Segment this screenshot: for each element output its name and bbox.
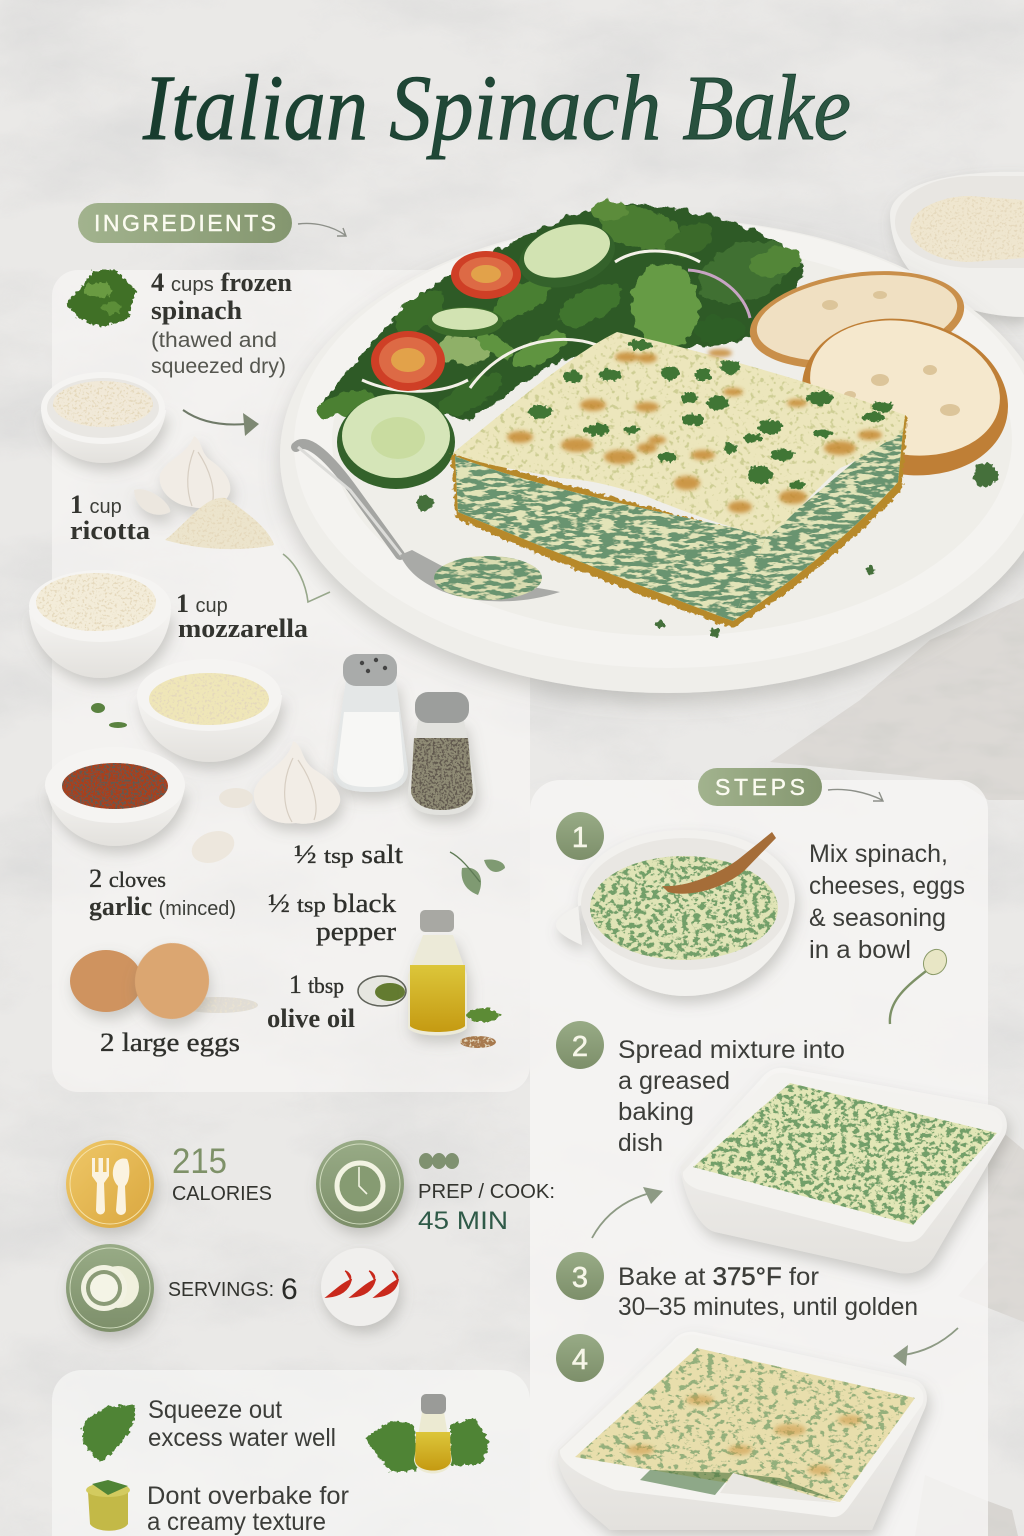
- stat: calories: [172, 1142, 272, 1205]
- icon: leaf sprig: [450, 852, 505, 895]
- tip image: oil and parsley: [365, 1394, 490, 1474]
- tip: overbake: Dont overbake for: [147, 1482, 349, 1510]
- ingredient: eggs: [70, 935, 258, 1027]
- text: ricotta: [70, 490, 150, 545]
- icon: herb stem: [890, 945, 951, 1024]
- ingredient: chili flake bowl: [45, 747, 185, 846]
- panel: steps: [530, 780, 988, 1536]
- step 1 badge: [556, 812, 604, 860]
- ingredient: parmesan bowl: [137, 659, 282, 762]
- text: olive oil: 1 tbsp: [289, 970, 344, 999]
- arrow: ricotta: [183, 410, 259, 436]
- stat: servings: [168, 1273, 298, 1306]
- text: mozzarella: 1 cup: [176, 589, 228, 618]
- ingredient: salt shaker: [333, 654, 408, 792]
- stat: servings: SERVINGS:: [168, 1279, 274, 1301]
- ingredient: garlic and crumbs: [134, 436, 274, 549]
- onion rings: [362, 251, 750, 391]
- tip: overbake: [147, 1482, 349, 1536]
- stat: prep and cook time: 45 MIN: [418, 1207, 508, 1235]
- stat: servings: 6: [281, 1273, 298, 1306]
- cucumbers: [337, 214, 622, 489]
- step 2 text: baking: [618, 1098, 694, 1126]
- step 3 badge: [556, 1252, 604, 1300]
- step 4 badge: 4: [572, 1344, 588, 1376]
- stat: prep and cook time: PREP / COOK:: [418, 1181, 555, 1203]
- panel: tips: [52, 1370, 530, 1536]
- text: garlic: 2 cloves: [89, 864, 166, 893]
- text: garlic: [89, 864, 236, 921]
- icon: spice level chilies: [321, 1248, 399, 1326]
- small leaves: [91, 703, 127, 728]
- step 1 text: in a bowl: [809, 936, 911, 964]
- icon: calories fork and knife: [66, 1140, 154, 1228]
- step 2 text: dish: [618, 1129, 663, 1157]
- text: eggs: 2 large eggs: [100, 1028, 240, 1057]
- text: black pepper: ½ tsp black: [268, 889, 396, 918]
- step 2 text: a greased: [618, 1067, 730, 1095]
- tip: overbake: a creamy texture: [147, 1508, 326, 1536]
- top right bowl of parmesan: [890, 172, 1024, 317]
- text: spinach amount: 4 cups frozen: [151, 268, 293, 297]
- ingredient: ricotta bowl: [41, 372, 166, 463]
- steps heading pill: [698, 768, 822, 806]
- panel: ingredients: [52, 270, 530, 1092]
- plate with spinach bake: [280, 198, 1024, 693]
- arrow: mozzarella: [283, 554, 330, 602]
- text: spinach amount: [151, 268, 293, 378]
- ingredient: mozzarella bowl: [29, 570, 171, 678]
- tip: squeeze: Squeeze out: [148, 1396, 282, 1424]
- step 3 text: 30–35 minutes, until golden: [618, 1293, 918, 1321]
- ingredient: garlic bulb and cloves: [187, 741, 340, 869]
- text: black pepper: pepper: [316, 917, 396, 946]
- tip: squeeze: [148, 1396, 336, 1452]
- step 3 badge: 3: [572, 1262, 588, 1294]
- step 2 baking dish: [680, 1068, 1007, 1273]
- plate crumbs: [417, 463, 997, 638]
- ingredients heading pill: [78, 203, 292, 243]
- icon: plates: [66, 1244, 154, 1332]
- step 1 text: cheeses, eggs: [809, 872, 965, 900]
- tip: squeeze: excess water well: [148, 1424, 336, 1452]
- step 4 baked dish: [558, 1332, 927, 1530]
- stat: calories: 215: [172, 1142, 227, 1181]
- icon: clock: [316, 1140, 404, 1228]
- step 1 badge: 1: [572, 822, 588, 854]
- stat: calories: CALORIES: [172, 1183, 272, 1205]
- salad leaves: [313, 198, 805, 424]
- tip icon: herb tea cup: [86, 1480, 130, 1531]
- step 1 bowl: [556, 830, 795, 996]
- step 1 text: Mix spinach,: [809, 840, 948, 868]
- bread slices: [744, 258, 1023, 494]
- text: ricotta: ricotta: [70, 516, 150, 545]
- text: ricotta: 1 cup: [70, 490, 122, 519]
- spinach bake slice: [451, 332, 907, 628]
- step 1 text: & seasoning: [809, 904, 946, 932]
- text: olive oil: olive oil: [267, 1004, 355, 1033]
- text: spinach amount: spinach: [151, 296, 243, 325]
- step 4 badge: [556, 1334, 604, 1382]
- ingredient: pepper shaker: [408, 692, 476, 815]
- step 2 badge: [556, 1021, 604, 1069]
- steps heading pill: STEPS: [715, 774, 805, 800]
- kitchen towel: [770, 598, 1024, 1536]
- text: olive oil: [267, 970, 355, 1033]
- text: mozzarella: [176, 589, 308, 643]
- text: black pepper: [268, 889, 396, 946]
- text: salt: ½ tsp salt: [294, 840, 404, 869]
- tomatoes: [371, 251, 521, 391]
- text: spinach amount: (thawed and: [151, 329, 277, 352]
- ingredient: parsley: [66, 270, 136, 327]
- spoon: [296, 444, 560, 601]
- step 2 badge: 2: [572, 1031, 588, 1063]
- step 2 text: Spread mixture into: [618, 1036, 845, 1064]
- arrow: steps: [828, 789, 883, 801]
- step 2 text: [618, 1036, 845, 1157]
- arrow: step 2 to 3: [592, 1187, 663, 1238]
- step 3 text: Bake at 375°F for: [618, 1263, 819, 1291]
- text: mozzarella: mozzarella: [178, 614, 308, 643]
- text: spinach amount: squeezed dry): [151, 355, 286, 378]
- tip icon: parsley: [82, 1405, 135, 1462]
- ingredient: olive oil bottle and herbs: [358, 910, 499, 1048]
- text: garlic: garlic (minced): [89, 892, 236, 921]
- step 3 text: [618, 1263, 918, 1321]
- arrow: ingredients to plate: [298, 223, 346, 236]
- plate: [280, 219, 1024, 693]
- step 1 text: [809, 840, 965, 964]
- ingredients heading pill: INGREDIENTS: [94, 210, 276, 236]
- title: Italian Spinach Bake: [142, 57, 851, 160]
- arrow: step 3 to 4: [893, 1328, 958, 1366]
- stat: prep and cook time: [418, 1153, 555, 1235]
